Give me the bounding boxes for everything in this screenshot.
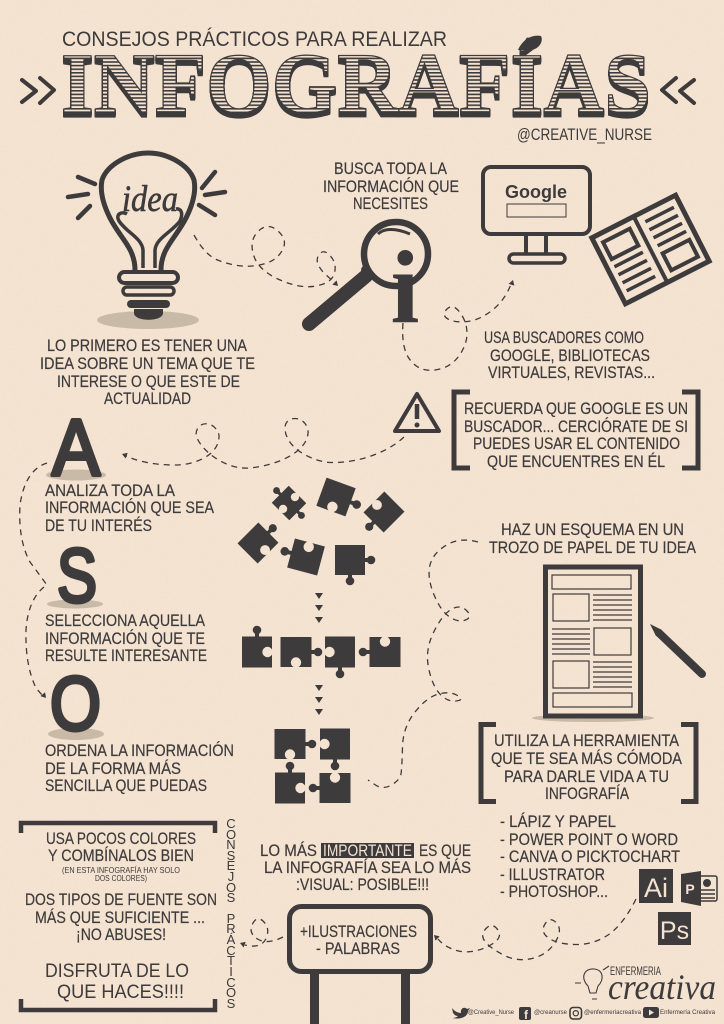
footer: social links: @Creative_Nurse — [468, 1009, 514, 1016]
callout: recuerda google: PUEDES USAR EL CONTENIDO — [473, 435, 680, 453]
icon: PowerPoint: P — [685, 881, 695, 897]
list: herramientas — [500, 812, 680, 901]
panel: consejos: (EN ESTA INFOGRAFÍA HAY SOLO — [62, 866, 180, 875]
footer: social links: @creanurse — [534, 1009, 567, 1016]
logo: enfermería creativa — [575, 964, 716, 1007]
text: lo más importante: LA INFOGRAFÍA SEA LO MÁS — [264, 858, 471, 877]
sign: ilustraciones palabras: - PALABRAS — [316, 940, 400, 958]
callout: recuerda google: QUE ENCUENTRES EN ÉL — [487, 452, 665, 471]
icon: Google monitor: Google — [505, 182, 567, 202]
icon: PowerPoint — [681, 871, 717, 906]
text: haz un esquema — [489, 521, 696, 557]
text: tener una idea: ACTUALIDAD — [104, 390, 191, 408]
text: busca la información — [323, 160, 459, 213]
text: usa buscadores: VIRTUALES, REVISTAS... — [488, 364, 655, 382]
icon: Illustrator — [639, 869, 673, 903]
icon: right chevrons — [662, 78, 694, 103]
text: tener una idea: LO PRIMERO ES TENER UNA — [47, 337, 247, 355]
icon: Google monitor — [483, 167, 590, 263]
icon: assembled puzzle — [274, 728, 350, 804]
sign: ilustraciones palabras: +ILUSTRACIONES — [300, 923, 417, 941]
icon: paper sketch — [532, 567, 654, 722]
callout: utiliza la herramienta: UTILIZA LA HERRAMIENTA — [494, 732, 679, 750]
footer: social links: @enfermeriacreativa — [584, 1009, 641, 1016]
icon: open book — [592, 195, 709, 304]
footer: social links: f — [524, 1008, 529, 1022]
arrow: down triangles 1 — [315, 593, 323, 623]
callout: utiliza la herramienta: PARA DARLE VIDA A TU — [504, 768, 669, 786]
list: herramientas: - ILLUSTRATOR — [500, 866, 605, 884]
sign: ilustraciones palabras — [290, 906, 430, 1024]
arrow: tools to sign — [432, 899, 636, 960]
text: usa buscadores — [484, 329, 655, 382]
list: herramientas: - PHOTOSHOP... — [500, 883, 608, 901]
arrow: A to S — [20, 463, 47, 585]
text: lo más importante: :VISUAL: POSIBLE!!! — [296, 876, 429, 894]
icon: magnifying glass with i: i — [391, 230, 419, 345]
text: ordena — [45, 741, 234, 795]
panel: consejos: MÁS QUE SUFICIENTE ... — [35, 908, 205, 927]
text: analiza: DE TU INTERÉS — [45, 516, 152, 535]
text: usa buscadores: USA BUSCADORES COMO — [484, 329, 644, 347]
logo: enfermería creativa: ENFERMERIA — [610, 964, 661, 978]
icon: light bulb idea: idea — [122, 179, 178, 220]
list: herramientas: - POWER POINT O WORD — [500, 831, 678, 849]
logo: enfermería creativa: creativa — [608, 967, 716, 1007]
author handle: @CREATIVE_NURSE — [517, 126, 652, 144]
text: tener una idea: IDEA SOBRE UN TEMA QUE TE — [40, 355, 255, 373]
arrow: bulb to magnifier — [194, 226, 340, 288]
text: ordena: ORDENA LA INFORMACIÓN — [45, 741, 234, 760]
callout: utiliza la herramienta: QUE TE SEA MÁS CÓMODA — [491, 749, 682, 768]
text: tener una idea: INTERESE O QUE ESTE DE — [57, 373, 240, 391]
text: haz un esquema: TROZO DE PAPEL DE TU IDEA — [489, 539, 696, 557]
list: herramientas: - CANVA O PICKTOCHART — [500, 848, 680, 866]
text: tener una idea — [40, 337, 255, 408]
panel: consejos: QUE HACES!!!! — [57, 982, 184, 1003]
panel: consejos: DISFRUTA DE LO — [45, 961, 189, 982]
text: ordena: DE LA FORMA MÁS — [45, 759, 181, 778]
letter A with shadow: A — [52, 403, 101, 492]
icon: row of puzzle pieces — [242, 626, 400, 678]
text: busca la información: NECESITES — [353, 195, 428, 213]
callout: utiliza la herramienta — [481, 724, 696, 803]
panel: consejos: ¡NO ABUSES! — [76, 926, 166, 944]
callout: utiliza la herramienta: INFOGRAFÍA — [545, 784, 629, 803]
text: lo más importante — [260, 841, 471, 894]
callout: recuerda google: RECUERDA QUE GOOGLE ES UN — [464, 400, 688, 418]
icon: Illustrator: Ai — [644, 873, 668, 903]
letter S with shadow: S — [57, 534, 97, 619]
icon: light bulb idea — [68, 153, 225, 329]
footer: social links: Enfermería Creativa — [660, 1009, 715, 1016]
arrow: down triangles 2 — [315, 685, 323, 715]
text: selecciona: RESULTE INTERESANTE — [45, 647, 207, 665]
text: analiza: ANALIZA TODA LA — [45, 482, 175, 500]
arrow: sketch to sign — [368, 540, 478, 788]
panel: consejos: USA POCOS COLORES — [46, 830, 196, 848]
icon: scattered puzzle pieces — [238, 478, 404, 585]
icon: warning triangle — [395, 394, 439, 431]
arrow: warning to A — [121, 418, 404, 468]
footer: social links — [452, 1007, 715, 1022]
icon: magnifying glass with i — [309, 222, 428, 345]
vertical label: consejos prácticos: CONSEJOS PRÁCTICOS — [226, 816, 236, 1011]
arrow: magnifier to monitor — [403, 279, 516, 370]
arrow: S to O — [26, 587, 48, 700]
text: analiza: INFORMACIÓN QUE SEA — [45, 498, 214, 517]
icon: Photoshop: Ps — [660, 917, 689, 945]
panel: consejos: DOS TIPOS DE FUENTE SON — [25, 891, 217, 909]
list: herramientas: - LÁPIZ Y PAPEL — [500, 812, 616, 831]
text: haz un esquema: HAZ UN ESQUEMA EN UN — [501, 521, 684, 539]
callout: recuerda google: BUSCADOR... CERCIÓRATE DE SI — [464, 417, 688, 436]
text: ordena: SENCILLA QUE PUEDAS — [45, 777, 207, 795]
text: selecciona: SELECCIONA AQUELLA — [45, 612, 205, 630]
arrow: sign to tips — [239, 919, 283, 948]
heading: consejos prácticos: CONSEJOS PRÁCTICOS PARA REALIZAR — [62, 26, 447, 51]
text: busca la información: INFORMACIÓN QUE — [323, 177, 459, 196]
text: lo más importante: LO MÁS — [260, 841, 317, 860]
panel: consejos: Y COMBÍNALOS BIEN — [48, 846, 194, 865]
panel: consejos: DOS COLORES) — [95, 874, 147, 883]
panel: consejos — [21, 823, 217, 1010]
title: infografías: INFOGRAFÍAS — [61, 35, 651, 131]
icon: pen — [650, 624, 702, 674]
callout: recuerda google — [454, 392, 698, 471]
text: selecciona — [45, 612, 207, 665]
text: lo más importante: ES QUE — [419, 842, 471, 860]
text: analiza — [45, 482, 214, 535]
text: busca la información: BUSCA TODA LA — [334, 160, 447, 178]
text: lo más importante: IMPORTANTE — [323, 842, 412, 860]
icon: left chevrons — [22, 78, 54, 103]
letter O with shadow: O — [50, 662, 101, 747]
text: usa buscadores: GOOGLE, BIBLIOTECAS — [490, 347, 650, 365]
text: selecciona: INFORMACIÓN QUE TE — [45, 629, 205, 648]
